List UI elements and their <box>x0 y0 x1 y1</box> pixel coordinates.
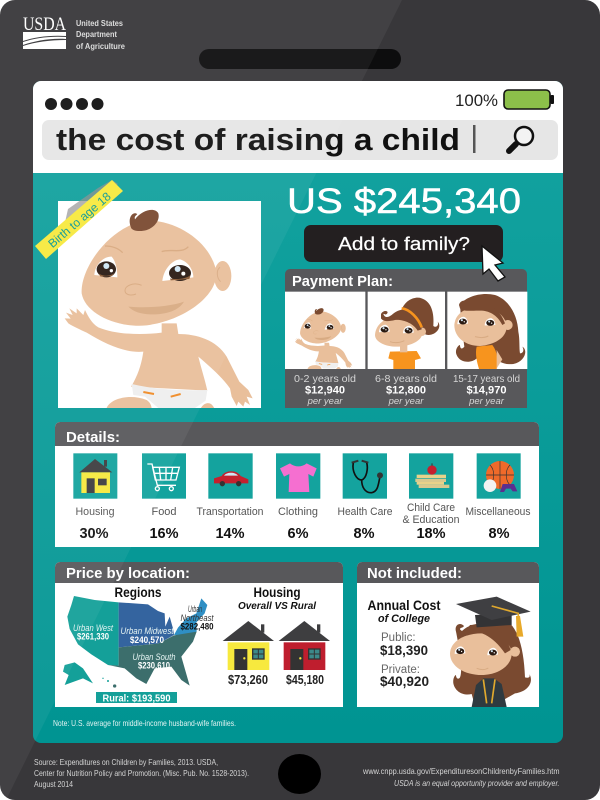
heading: details: Details: <box>66 429 120 446</box>
label: urban northeast: $282,480 <box>180 622 214 632</box>
home button <box>278 754 321 794</box>
website and equal opportunity text: USDA is an equal opportunity provider and employer. <box>394 778 560 788</box>
age cost: 15-17 years: 15-17 years old <box>453 373 520 385</box>
battery status: 100% <box>455 92 498 110</box>
label: urban northeast: Urban <box>188 604 202 614</box>
website and equal opportunity text <box>362 766 560 788</box>
icon: housing <box>73 453 117 499</box>
heading: housing: Housing <box>254 585 300 600</box>
college cost text: Private: <box>381 664 420 676</box>
source text: Center for Nutrition Policy and Promotion. (Misc. Pub. No. 1528-2013). <box>34 768 249 778</box>
baby illustration <box>65 210 253 410</box>
housing prices: $73,260 <box>228 672 268 687</box>
icon: child care and education books <box>409 453 453 499</box>
label: urban midwest <box>120 626 174 646</box>
labels: categories: & Education <box>402 514 460 526</box>
age cost: 15-17 years <box>453 373 520 407</box>
labels: categories: Food <box>152 506 176 518</box>
labels: categories: Child Care <box>407 502 455 514</box>
USDA logo: Department <box>76 29 117 39</box>
percentages: 16% <box>149 526 179 542</box>
label: urban northeast <box>180 604 214 632</box>
college cost text: of College <box>378 613 430 625</box>
source text: Source: Expenditures on Children by Families, 2013. USDA, <box>34 757 218 767</box>
website and equal opportunity text: www.cnpp.usda.gov/ExpendituresonChildrenbyFamilies.htm <box>362 766 560 776</box>
labels: categories: Health Care <box>338 506 392 518</box>
screen <box>33 81 563 743</box>
icon: cursor arrow <box>482 246 505 281</box>
heading: payment plan: Payment Plan: <box>292 273 393 290</box>
USDA logo: United States <box>76 18 123 28</box>
age cost: 6-8 years: $12,800 <box>386 384 426 396</box>
age cost: 6-8 years <box>375 373 437 407</box>
heading: housing <box>238 585 317 612</box>
icon: miscellaneous ball and controller <box>477 453 521 499</box>
status dots <box>45 98 104 110</box>
age cost: 15-17 years: $14,970 <box>466 384 506 396</box>
housing prices <box>228 672 324 687</box>
percentages: 14% <box>215 526 245 542</box>
age cost: 6-8 years: per year <box>388 396 424 407</box>
icon: transportation car <box>208 453 253 499</box>
age cost: 0-2 years: 0-2 years old <box>294 373 356 385</box>
ribbon: birth to age 18: Birth to age 18 <box>45 189 114 251</box>
battery status <box>455 90 554 110</box>
housing prices: $45,180 <box>286 672 324 687</box>
percentages: 30% <box>79 526 109 542</box>
labels: categories: Transportation <box>196 506 264 518</box>
source text <box>34 757 249 789</box>
USDA logo: USDA <box>23 14 66 35</box>
total price: US $245,340 <box>287 182 521 221</box>
house: overall <box>223 621 274 670</box>
add to family button <box>304 225 503 262</box>
label: urban south: Urban South <box>132 652 176 663</box>
panel: baby <box>58 201 261 410</box>
house: rural <box>279 621 330 670</box>
USDA logo <box>23 14 125 51</box>
search bar <box>42 120 558 160</box>
panel: details <box>55 422 539 547</box>
graduate illustration <box>450 597 531 707</box>
label: urban south <box>132 652 176 672</box>
heading: price by location: Price by location: <box>66 565 190 582</box>
labels: categories: Clothing <box>278 506 318 518</box>
rural price tag: Rural: $193,590 <box>102 692 171 704</box>
cell: infant <box>285 292 365 369</box>
college cost text: $18,390 <box>380 642 428 658</box>
labels: categories: Miscellaneous <box>466 506 531 518</box>
speaker slot <box>199 49 401 69</box>
label: urban northeast: Northeast <box>180 613 214 623</box>
percentages <box>79 526 510 542</box>
label: urban west: Urban West <box>73 623 113 634</box>
heading: housing: Overall VS Rural <box>238 600 317 612</box>
label: urban west: $261,330 <box>77 632 109 642</box>
label: urban midwest: Urban Midwest <box>120 626 174 637</box>
labels: categories: Housing <box>76 506 114 518</box>
icon: clothing shirt <box>276 453 320 499</box>
note: Note: U.S. average for middle-income husband-wife families. <box>53 718 236 728</box>
cell: child <box>368 292 445 369</box>
ribbon: birth to age 18 <box>35 180 123 259</box>
percentages: 8% <box>489 526 510 542</box>
heading: not included: Not included: <box>367 565 462 582</box>
label: urban west <box>73 623 113 642</box>
age cost: 0-2 years: per year <box>307 396 343 407</box>
age cost: 15-17 years: per year <box>468 396 505 407</box>
panel: payment plan <box>285 269 527 408</box>
age cost: 0-2 years <box>294 373 356 407</box>
age cost: 6-8 years: 6-8 years old <box>375 373 437 385</box>
heading: regions: Regions <box>114 585 162 600</box>
icon: food cart <box>142 453 186 499</box>
label: urban south: $230,610 <box>138 660 170 672</box>
college cost text: $40,920 <box>380 673 429 689</box>
percentages: 6% <box>288 526 309 542</box>
percentages: 8% <box>354 526 375 542</box>
college cost text <box>368 598 441 689</box>
college cost text: Annual Cost <box>368 598 441 613</box>
USDA logo: of Agriculture <box>76 41 125 51</box>
percentages: 18% <box>416 526 446 542</box>
cell: teen <box>447 292 527 369</box>
college cost text: Public: <box>381 632 416 644</box>
search bar: the cost of raising a child <box>56 122 460 157</box>
icon: health care stethoscope <box>343 453 387 499</box>
panel: price by location <box>55 562 343 707</box>
panel: not included <box>357 562 539 707</box>
label: urban midwest: $240,570 <box>130 635 164 646</box>
age cost: 0-2 years: $12,940 <box>305 384 345 396</box>
icon: magnifier <box>509 127 533 151</box>
labels: categories <box>76 502 531 526</box>
add to family button: Add to family? <box>338 233 470 254</box>
source text: August 2014 <box>34 779 73 789</box>
map: United States regions <box>63 596 207 688</box>
